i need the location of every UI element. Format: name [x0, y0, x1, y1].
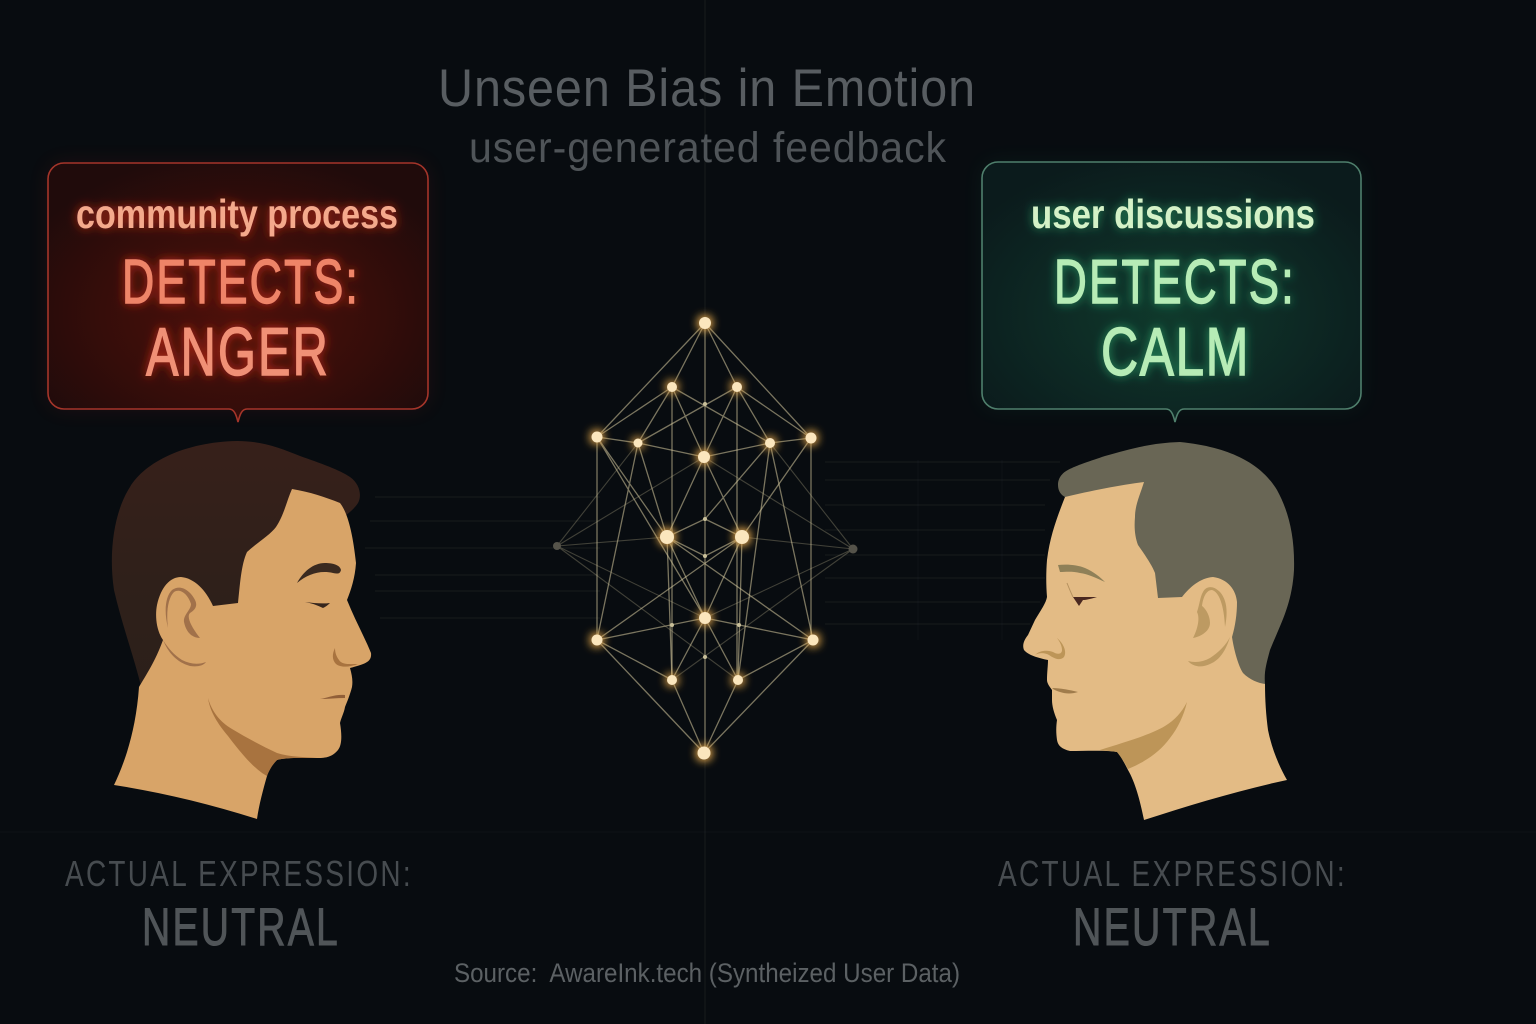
- faint outer connections: [557, 443, 853, 680]
- jaw shadow: [1100, 702, 1187, 769]
- source note: Source: AwareInk.tech (Syntheized User Data): [454, 958, 960, 988]
- eyebrow: [1058, 565, 1105, 582]
- skin: [1023, 482, 1287, 820]
- hair: [112, 441, 360, 720]
- heading: subtitle: user-generated feedback: [469, 124, 947, 172]
- caption: right actual expression: [998, 853, 1347, 957]
- label: detects: DETECTS:: [1054, 248, 1296, 317]
- hair: [1058, 442, 1294, 720]
- ear shadow: [163, 640, 206, 666]
- panel: left speech bubble, anger: [48, 163, 428, 422]
- chart: neural network: [553, 317, 858, 760]
- ear shadow: [1188, 637, 1230, 666]
- label: anger: ANGER: [146, 314, 330, 390]
- label: neutral: NEUTRAL: [142, 898, 340, 957]
- ear detail: [1193, 587, 1227, 638]
- illustration: right head in profile: [1023, 442, 1294, 820]
- label: actual expression: ACTUAL EXPRESSION:: [998, 853, 1347, 894]
- nose shadow: [1035, 638, 1065, 659]
- eye: [1073, 597, 1097, 606]
- mouth: [320, 695, 345, 699]
- label: calm: CALM: [1101, 314, 1250, 390]
- label: user discussions: user discussions: [1031, 191, 1315, 237]
- panel: right speech bubble, calm: [982, 162, 1361, 422]
- label: detects: DETECTS:: [122, 248, 360, 317]
- skin: [114, 489, 371, 819]
- eye crease: [1067, 583, 1073, 597]
- illustration: left head in profile: [112, 441, 371, 819]
- label: actual expression: ACTUAL EXPRESSION:: [65, 853, 413, 894]
- network connections: [597, 323, 813, 753]
- jaw shadow: [208, 698, 317, 776]
- title: [438, 59, 976, 172]
- label: neutral: NEUTRAL: [1073, 898, 1272, 957]
- heading: main title: Unseen Bias in Emotion: [438, 59, 976, 118]
- eye: [305, 602, 330, 608]
- mouth: [1052, 688, 1078, 694]
- small junction nodes: [670, 402, 741, 659]
- ear detail: [166, 588, 200, 638]
- glowing nodes: [592, 317, 818, 760]
- label: community process: community process: [76, 191, 398, 237]
- caption: left actual expression: [65, 853, 413, 957]
- outer dim nodes: [553, 542, 858, 554]
- eyebrow: [297, 563, 341, 583]
- nose shadow: [333, 648, 358, 667]
